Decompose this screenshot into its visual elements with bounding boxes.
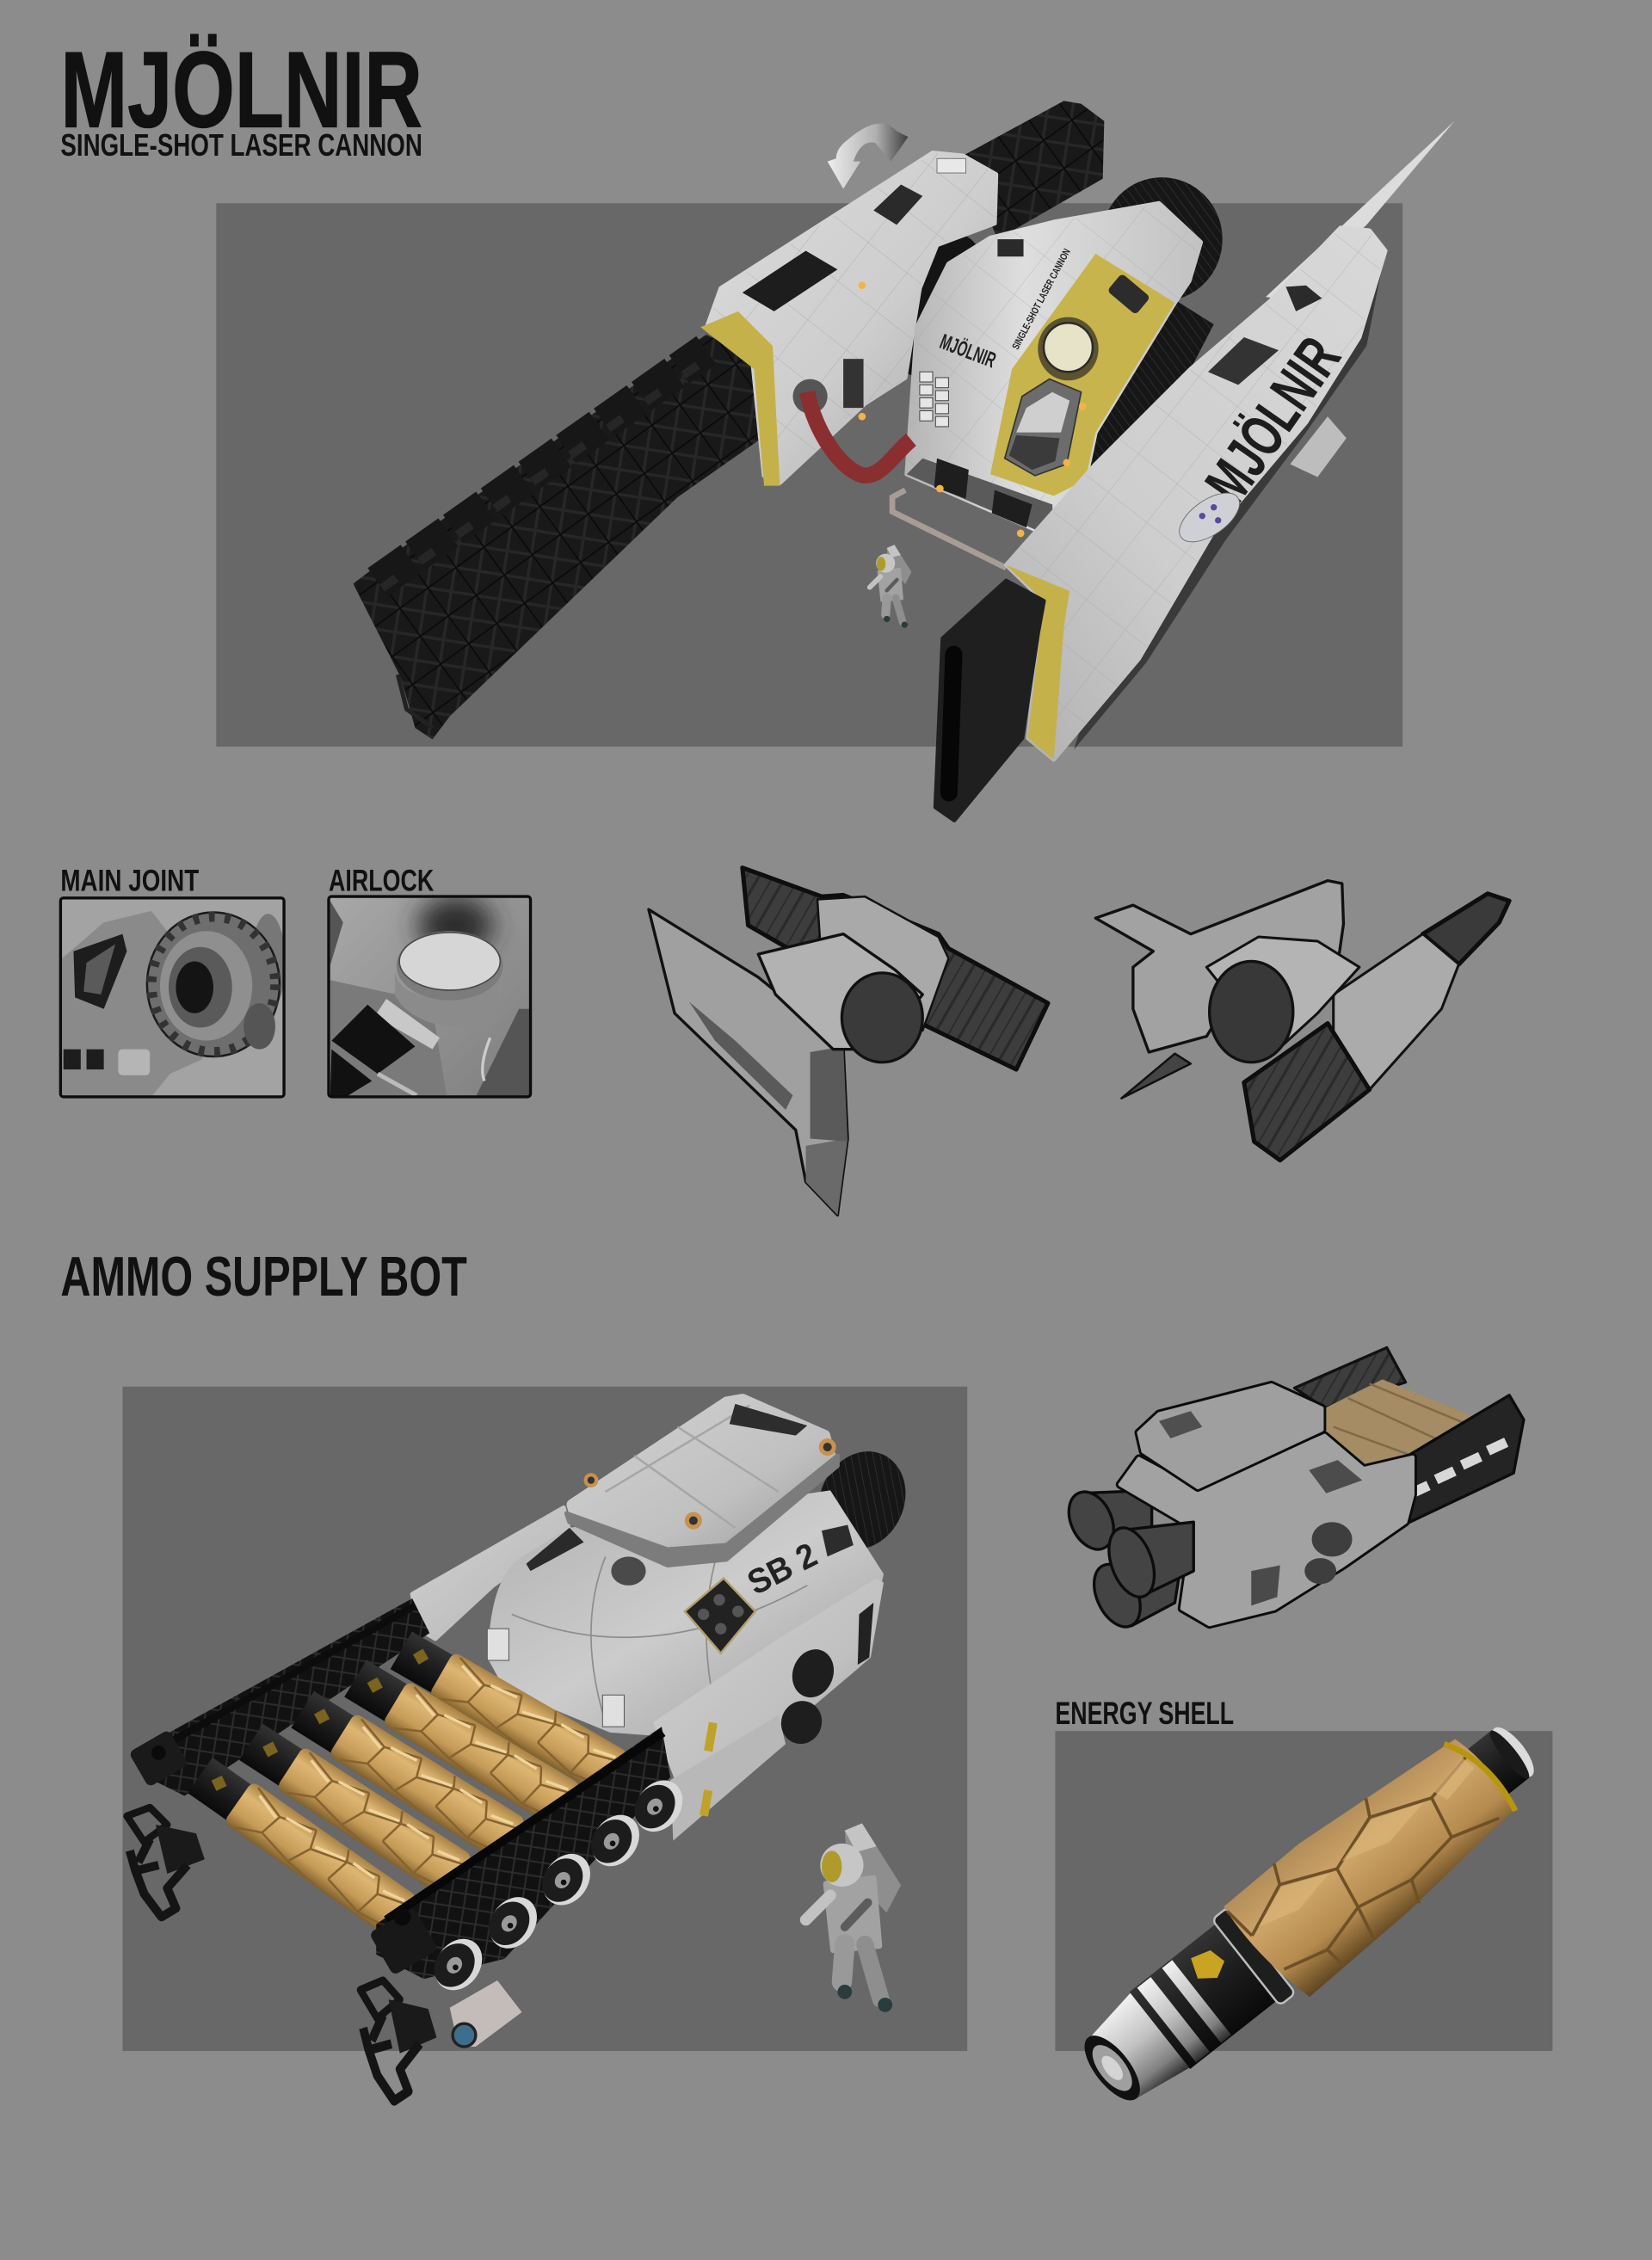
front black rail — [369, 1727, 670, 1979]
black end cap — [935, 581, 1044, 820]
small rear fin — [1290, 416, 1347, 477]
pipe — [892, 490, 1006, 568]
panel: cannon backdrop — [216, 203, 1402, 747]
lower rail — [1406, 1395, 1524, 1522]
silver bands — [1137, 1960, 1231, 2062]
white arm — [700, 153, 996, 486]
right wing — [935, 228, 1385, 820]
body markings: MJÖLNIR — [937, 329, 999, 373]
right white arm — [653, 1579, 884, 1840]
yellow wing band — [1006, 565, 1069, 760]
gold armour — [1221, 1723, 1531, 2004]
central body: SINGLE-SHOT LASER CANNON — [1010, 247, 1073, 352]
hull — [1120, 1436, 1413, 1624]
far end cap — [1460, 1721, 1541, 1802]
claw left — [126, 1807, 205, 1917]
roller wheels — [425, 1771, 692, 1999]
centre nozzle — [1117, 1522, 1193, 1594]
panel: energy shell backdrop — [1055, 1731, 1552, 2051]
sensor pod — [1171, 483, 1248, 551]
astronaut small — [870, 545, 911, 628]
label: airlock: AIRLOCK — [329, 864, 435, 897]
central body — [758, 934, 922, 1050]
front ring — [875, 221, 1002, 390]
collar ring — [1212, 1907, 1296, 2005]
dark rear arm — [743, 868, 1048, 1069]
inset: main joint — [60, 898, 286, 1097]
wing lettering: MJÖLNIR — [1192, 324, 1353, 514]
dark upper tail — [1423, 894, 1509, 964]
rear nozzle — [803, 1437, 922, 1564]
solar panel — [1208, 337, 1279, 385]
armour plates — [1222, 1727, 1523, 2002]
cockpit window — [1005, 379, 1082, 476]
main hull — [487, 1490, 884, 1737]
section heading: ammo supply bot: AMMO SUPPLY BOT — [60, 1245, 467, 1308]
far light arm — [817, 896, 948, 1031]
shell row — [186, 1629, 628, 1938]
claw right — [361, 1980, 436, 2101]
keypad — [920, 372, 948, 427]
rear nozzle ring — [1101, 177, 1223, 301]
dark lower barrel — [1244, 1024, 1370, 1161]
left black rail — [128, 1598, 429, 1796]
near wing — [649, 909, 848, 1215]
fin spike — [1266, 121, 1454, 299]
dark spike fin — [1121, 1054, 1191, 1099]
rear arm — [1334, 934, 1458, 1090]
panel: ammo bot backdrop — [122, 1387, 967, 2051]
illustration: main cannon — [353, 101, 1454, 820]
nozzles — [1060, 1485, 1182, 1634]
SB 2 marking: SB 2 — [742, 1536, 823, 1603]
rear nozzle — [841, 973, 922, 1062]
wing — [1095, 881, 1343, 1052]
illustration: ammo supply bot — [126, 1400, 922, 2101]
view: cannon from below right — [1095, 881, 1509, 1161]
vent diamond — [685, 1579, 755, 1653]
gold shells — [1316, 1379, 1475, 1466]
icon: rotation arrow — [828, 124, 908, 188]
nozzle — [1210, 961, 1293, 1062]
top pod — [1139, 1385, 1322, 1487]
view: cannon from below left — [649, 868, 1048, 1215]
view: ammo bot rear — [1060, 1347, 1524, 1634]
inset: airlock — [329, 896, 531, 1097]
label: main joint: MAIN JOINT — [60, 864, 200, 897]
black sleeve — [1130, 1915, 1287, 2069]
label: energy shell: ENERGY SHELL — [1055, 1696, 1234, 1731]
airlock hatch — [1038, 317, 1099, 380]
title: MJÖLNIR — [60, 28, 422, 150]
radiation decal — [1186, 1943, 1230, 1987]
upper rail — [1294, 1347, 1406, 1408]
illustration: energy shell — [1061, 1697, 1563, 2131]
yellow rim — [1444, 1733, 1518, 1820]
subtitle: SINGLE-SHOT LASER CANNON — [60, 127, 422, 163]
top pod — [566, 1400, 837, 1565]
warning lights — [859, 281, 1087, 537]
yellow band — [990, 254, 1174, 496]
astronaut — [806, 1823, 901, 2012]
silver nose — [1082, 1993, 1189, 2105]
central body — [1206, 937, 1359, 1045]
left white arm — [412, 1507, 570, 1639]
red hose — [807, 392, 911, 476]
camera box — [450, 1980, 521, 2047]
upper black tail — [963, 101, 1104, 239]
central body — [907, 203, 1201, 538]
right ring — [1082, 299, 1214, 483]
black barrel — [353, 335, 760, 739]
